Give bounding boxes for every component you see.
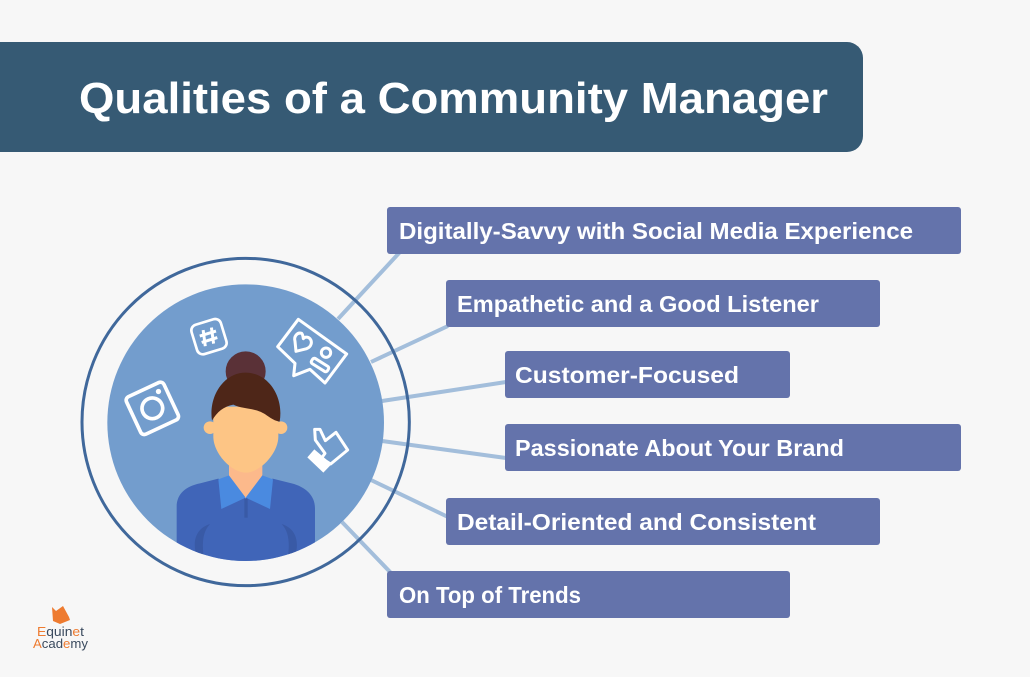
logo: Equinet Academy [33, 606, 88, 651]
quality 6 [387, 571, 790, 618]
icon: hashtag [190, 318, 228, 356]
quality 1: Digitally-Savvy with Social Media Experience [399, 218, 913, 244]
quality 5 [446, 498, 880, 545]
quality 5: Detail-Oriented and Consistent [457, 509, 816, 535]
quality 1 [387, 207, 961, 254]
logo: Equinet Academy: Academy [33, 636, 88, 651]
neck [229, 466, 262, 498]
connector lines [338, 252, 506, 574]
title: Qualities of a Community Manager [79, 74, 828, 123]
face [213, 407, 278, 473]
quality 3: Customer-Focused [515, 362, 739, 388]
ears [204, 421, 214, 434]
quality 4: Passionate About Your Brand [515, 435, 844, 461]
collar [218, 475, 273, 509]
logo mark [52, 606, 70, 624]
quality 3 [505, 351, 790, 398]
shirt [177, 479, 315, 563]
quality 6: On Top of Trends [399, 582, 581, 608]
person [177, 351, 315, 563]
logo: Equinet Academy: Equinet [37, 625, 85, 639]
icon: thumbs up [307, 429, 348, 473]
community manager illustration [82, 258, 409, 586]
quality 2: Empathetic and a Good Listener [457, 291, 819, 317]
quality 2 [446, 280, 880, 327]
quality 4 [505, 424, 961, 471]
icon: social bubble [278, 319, 347, 383]
title banner [0, 42, 863, 152]
hair [211, 373, 280, 422]
bun [226, 351, 266, 379]
icon: instagram [125, 381, 180, 436]
